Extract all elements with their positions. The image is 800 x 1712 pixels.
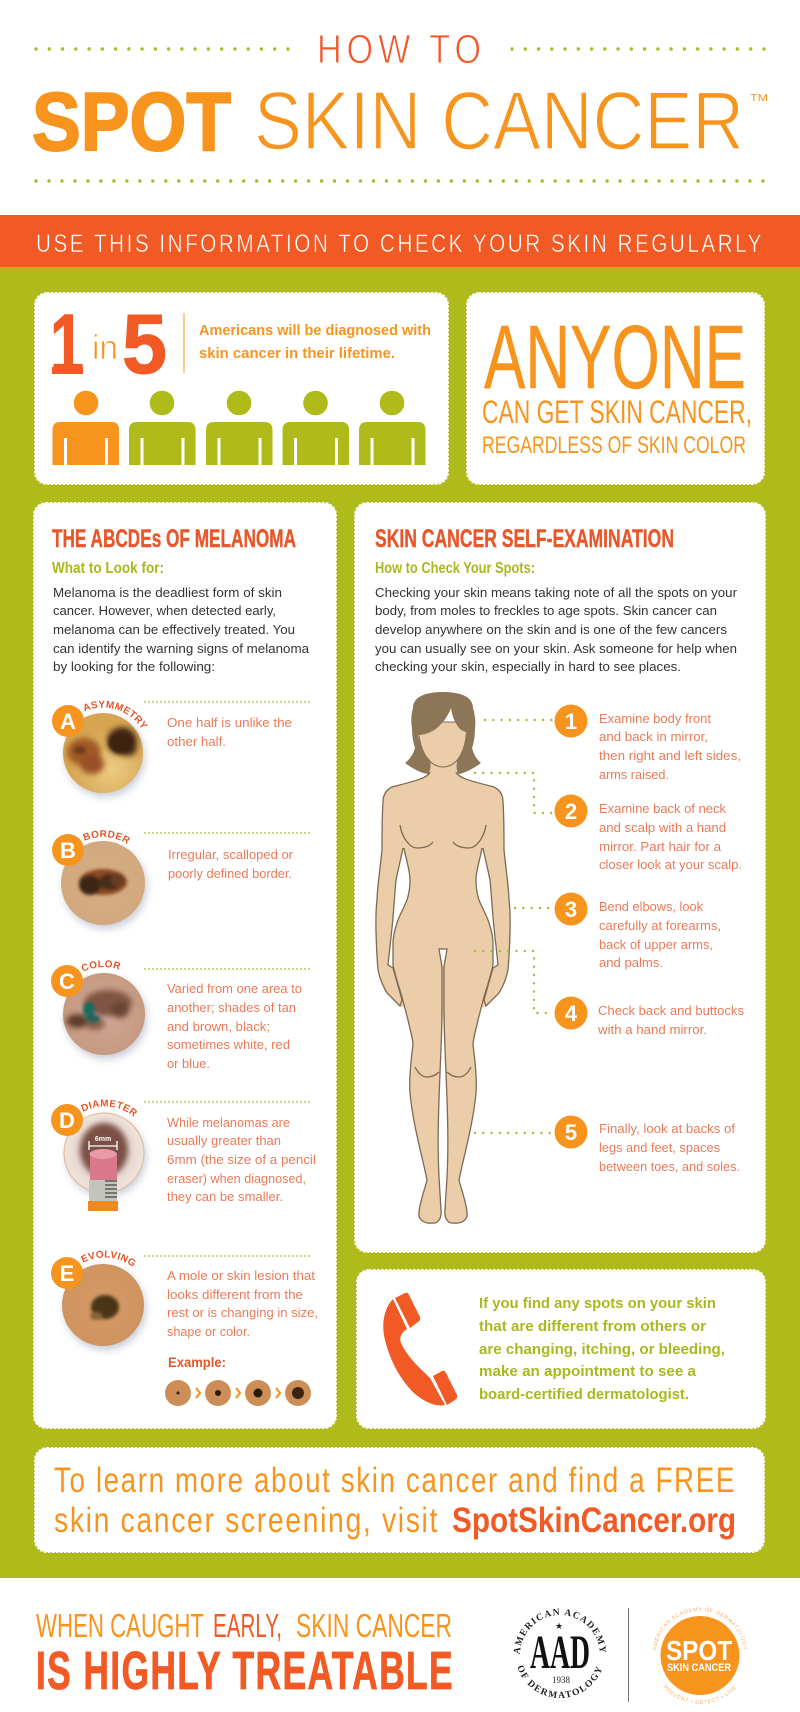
call to action text: that are different from others or <box>479 1319 706 1335</box>
item D: diameter: usually greater than <box>167 1134 281 1148</box>
item D: diameter: While melanomas are <box>167 1116 290 1130</box>
item E: evolving <box>51 1250 318 1406</box>
call to action text: If you find any spots on your skin <box>479 1296 716 1312</box>
intro text <box>53 586 309 674</box>
item C: color: or blue. <box>167 1057 210 1071</box>
item C: color: and brown, black; <box>167 1020 270 1034</box>
call to action text <box>479 1296 725 1403</box>
stat text: Americans will be diagnosed with <box>199 323 431 339</box>
logo: spot skin cancer badge <box>652 1607 748 1704</box>
item D: diameter: eraser) when diagnosed, <box>167 1172 306 1186</box>
statistic <box>50 297 167 391</box>
subheading: How to Check Your Spots: <box>375 560 535 577</box>
step 1: arms raised. <box>599 768 669 782</box>
item E: evolving: E <box>60 1261 74 1286</box>
connector dots <box>475 720 552 1133</box>
item E: evolving: EVOLVING <box>80 1250 136 1266</box>
intro text: by looking for the following: <box>53 660 215 674</box>
intro text: Checking your skin means taking note of all the spots on your <box>375 586 737 600</box>
item B: border <box>52 830 310 933</box>
step 3: and palms. <box>599 956 663 970</box>
subheading: What to Look for: <box>52 560 164 577</box>
logo: spot skin cancer badge: SPOT <box>666 1635 732 1666</box>
heading: how to: HOW TO <box>317 26 486 72</box>
heading: THE ABCDEs OF MELANOMA <box>52 525 296 553</box>
item C: color: COLOR <box>82 960 120 971</box>
item B: border: poorly defined border. <box>168 867 292 881</box>
face <box>418 722 467 767</box>
step 2: Examine back of neck <box>599 802 727 816</box>
logo: AAD seal: 1938 <box>552 1675 570 1685</box>
step 2: mirror. Part hair for a <box>599 840 721 854</box>
step 1: 1 <box>565 709 577 734</box>
step 3: back of upper arms, <box>599 938 713 952</box>
item A: asymmetry: other half. <box>167 735 226 749</box>
item E: evolving: rest or is changing in size, <box>167 1306 318 1320</box>
intro text: body, from moles to freckles to age spots. Skin cancer can <box>375 604 717 618</box>
logo: spot skin cancer badge: SKIN CANCER <box>667 1662 731 1674</box>
panel: 1 in 5 <box>35 293 448 484</box>
intro text <box>375 586 737 674</box>
item E: evolving: shape or color. <box>167 1325 250 1339</box>
footer tagline: SKIN CANCER <box>296 1607 452 1644</box>
item B: border: Irregular, scalloped or <box>168 848 293 862</box>
ruler and eraser <box>88 1136 118 1211</box>
logo: AAD seal: AMERICAN ACADEMY <box>514 1608 606 1654</box>
decorative dotted rules <box>36 49 766 181</box>
step 1 <box>554 704 741 782</box>
example label: Example: <box>168 1354 226 1370</box>
panel: anyone <box>467 293 764 484</box>
item E: evolving: looks different from the <box>167 1288 303 1302</box>
footer tagline <box>36 1607 454 1701</box>
item C: color: another; shades of tan <box>167 1001 296 1015</box>
statistic: 5 <box>122 297 167 391</box>
evolution sequence <box>165 1380 311 1406</box>
item D: diameter <box>51 1100 316 1211</box>
item E: evolving: A mole or skin lesion that <box>167 1269 316 1283</box>
step 4 <box>554 996 744 1037</box>
intro text: Melanoma is the deadliest form of skin <box>53 586 282 600</box>
footer tagline: WHEN CAUGHT <box>36 1607 204 1644</box>
orange banner <box>0 215 800 267</box>
step 2: 2 <box>565 799 577 824</box>
step 5: Finally, look at backs of <box>599 1122 736 1136</box>
logo: spot skin cancer badge: PREVENT • DETECT • LIVE <box>663 1684 736 1704</box>
call to action text: are changing, itching, or bleeding, <box>479 1342 725 1358</box>
step 5: legs and feet, spaces <box>599 1141 720 1155</box>
item C: color: C <box>59 969 75 994</box>
call to action text: board-certified dermatologist. <box>479 1387 689 1403</box>
item C: color: Varied from one area to <box>167 982 302 996</box>
logo: AAD seal <box>514 1608 606 1698</box>
trademark: TM <box>750 93 768 104</box>
item A: asymmetry: One half is unlike the <box>167 716 292 730</box>
logo: AAD seal: ★ <box>555 1621 563 1631</box>
item A: asymmetry <box>52 700 310 801</box>
step 3 <box>554 892 721 970</box>
item D: diameter: they can be smaller. <box>167 1190 283 1204</box>
footer tagline: IS HIGHLY TREATABLE <box>36 1641 454 1701</box>
panel: ABCDEs of melanoma <box>33 502 337 1429</box>
item B: border: BORDER <box>82 830 130 844</box>
step 5: 5 <box>565 1120 577 1145</box>
step 4: Check back and buttocks <box>598 1004 744 1018</box>
panel: learn more <box>35 1448 764 1552</box>
statistic: in <box>92 329 118 367</box>
step 5: between toes, and soles. <box>599 1160 740 1174</box>
step 1: and back in mirror, <box>599 730 708 744</box>
step 1: Examine body front <box>599 712 712 726</box>
panel: call to action <box>357 1270 765 1428</box>
logo: AAD seal: AAD <box>530 1626 590 1679</box>
intro text: can identify the warning signs of melanoma <box>53 642 309 656</box>
step 5 <box>554 1116 740 1174</box>
hair <box>405 692 481 774</box>
step 3: Bend elbows, look <box>599 900 704 914</box>
panel: learn more: skin cancer screening, visit <box>54 1501 439 1540</box>
step 3: carefully at forearms, <box>599 919 721 933</box>
panel: self-examination <box>355 503 765 1252</box>
step 3: 3 <box>565 897 577 922</box>
item C: color <box>51 960 310 1071</box>
intro text: you can usually see on your skin. Ask someone for help when <box>375 642 737 656</box>
heading: SKIN CANCER SELF-EXAMINATION <box>375 525 674 553</box>
call to action text: make an appointment to see a <box>479 1364 697 1380</box>
illustration: body <box>376 692 510 1223</box>
logo: AAD seal: OF DERMATOLOGY <box>518 1666 602 1698</box>
step 2: and scalp with a hand <box>599 821 726 835</box>
green background <box>0 267 800 1578</box>
logo: spot skin cancer badge: AMERICAN ACADEMY OF DERMATOLOGY <box>652 1607 748 1651</box>
step 2 <box>554 794 742 872</box>
step 4: 4 <box>565 1001 578 1026</box>
intro text: melanoma can be effectively treated. You <box>53 623 295 637</box>
item D: diameter: 6mm (the size of a pencil <box>167 1153 316 1167</box>
item C: color: sometimes white, red <box>167 1038 290 1052</box>
panel: learn more: SpotSkinCancer.org <box>452 1501 736 1540</box>
intro text: develop anywhere on the skin and is one of the few cancers <box>375 623 727 637</box>
logo divider <box>628 1608 630 1702</box>
item A: asymmetry: ASYMMETRY <box>84 700 148 728</box>
icon: people row <box>52 391 426 465</box>
item A: asymmetry: A <box>60 709 76 734</box>
step 2: closer look at your scalp. <box>599 858 742 872</box>
item D: diameter: DIAMETER <box>80 1100 137 1117</box>
intro text: checking your skin, especially in hard to see places. <box>375 660 681 674</box>
divider <box>183 313 185 373</box>
stat text <box>199 323 431 362</box>
heading: spot: SPOT <box>32 75 231 168</box>
icon: telephone <box>383 1293 457 1405</box>
header title <box>32 26 768 181</box>
footer tagline: EARLY, <box>213 1607 282 1644</box>
item D: diameter: D <box>59 1108 75 1133</box>
step 4: with a hand mirror. <box>597 1023 707 1037</box>
stat text: skin cancer in their lifetime. <box>199 346 395 362</box>
item B: border: B <box>60 838 76 863</box>
ruler and eraser: 6mm <box>95 1136 111 1143</box>
intro text: cancer. However, when detected early, <box>53 604 276 618</box>
step 1: then right and left sides, <box>599 749 741 763</box>
statistic: 1 <box>50 297 84 391</box>
